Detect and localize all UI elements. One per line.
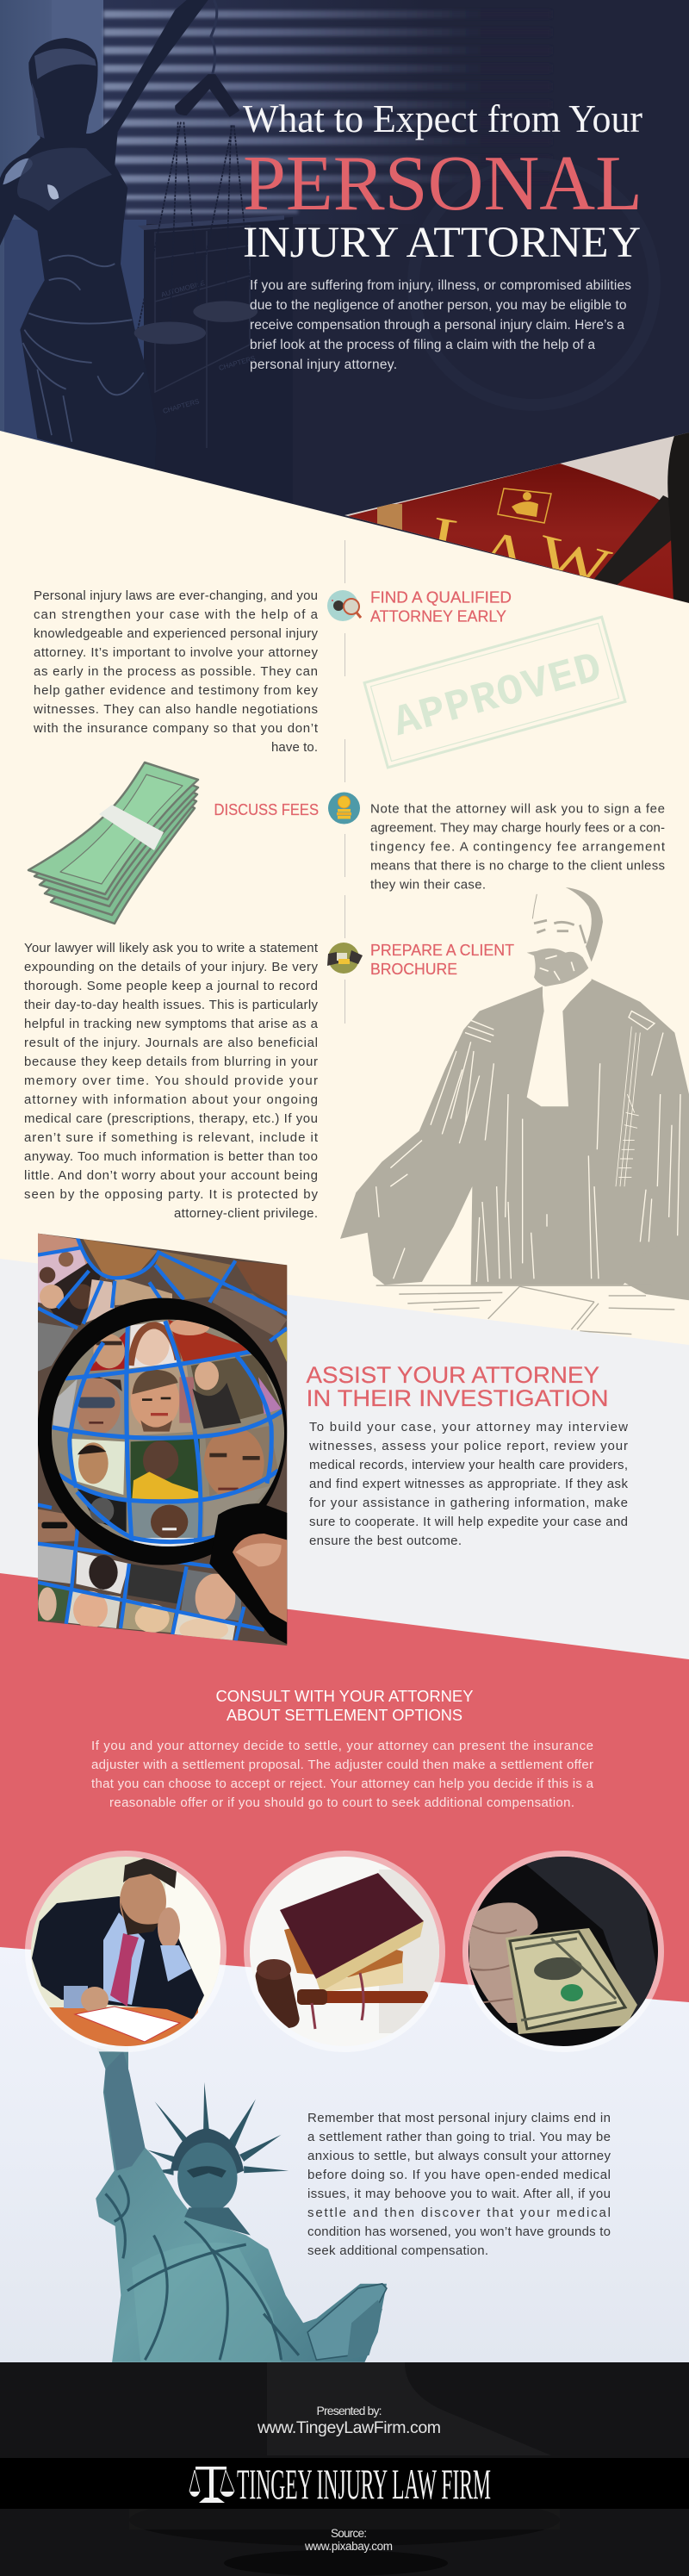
text: settlement options: If you and your attorney decide to settle, your attorney can present the insurance [91,1739,593,1753]
text: presented by: Presented by: [317,2404,382,2417]
intro text: personal injury attorney. [250,358,397,372]
text: find a qualified attorney early: witnesses. They can also handle negotiations [33,702,318,717]
heading: consult with your attorney: CONSULT WITH YOUR ATTORNEY [215,1688,474,1705]
text: discuss fees: means that there is no charge to the client unless [370,858,665,874]
heading: find a qualified attorney early: ATTORNEY EARLY [370,608,506,625]
text: settlement options: reasonable offer or if you should go to court to seek additional compensation. [109,1795,574,1810]
heading: assist your attorney: ASSIST YOUR ATTORNEY [307,1362,599,1388]
timeline line segments [344,540,346,1024]
icon: magnifier and key [327,590,361,621]
stamp: approved [364,617,625,768]
icon: coins [328,793,360,824]
intro text: If you are suffering from injury, illness, or compromised abilities [250,278,631,293]
text: prepare a client brochure: aren’t sure if something is relevant, include it [24,1130,319,1145]
text: closing advice: anxious to settle, but always consult your attorney [307,2149,611,2163]
panel: footer [0,2362,689,2576]
heading: assist your attorney: IN THEIR INVESTIGATION [307,1385,608,1411]
stamp: approved: APPROVED [388,644,607,749]
title [243,96,642,267]
text: source: Source: [331,2527,367,2540]
logo: scales icon [189,2467,234,2503]
text: source: www.pixabay.com [304,2540,393,2553]
text: find a qualified attorney early: Personal injury laws are ever-changing, and you [34,588,318,603]
text: settlement options: adjuster with a settlement proposal. The adjuster could then make a settlement offer [91,1758,593,1772]
text: assist your attorney [308,1420,629,1548]
text: closing advice: Remember that most personal injury claims end in [307,2111,611,2125]
text: settlement options: that you can choose to accept or reject. Your attorney can help you decide if this is a [91,1776,594,1791]
text: prepare a client brochure: Your lawyer will likely ask you to write a statement [24,941,319,955]
intro text: brief look at the process of filing a claim with the help of a [250,338,595,352]
text: closing advice: a settlement rather than going to trial. You may be [307,2130,611,2144]
intro text: due to the negligence of another person, you may be eligible to [250,298,627,313]
photo circle: attorney on the phone [25,1851,227,2052]
gold emblem [498,488,551,523]
text: assist your attorney: sure to cooperate. It will help expedite your case and [309,1515,628,1529]
text: closing advice: issues, it may behoove you to wait. After all, if you [307,2187,611,2201]
text: prepare a client brochure: result of the injury. Journals are also beneficial [24,1036,318,1050]
panel: cream steps background [0,431,689,1353]
panel: hero background: CHAPTERS [218,354,256,372]
image: statue of liberty [96,2046,387,2362]
text: prepare a client brochure: medical care (prescriptions, therapy, etc.) If you [24,1111,318,1126]
text: find a qualified attorney early: attorney. It’s important to involve your attorney [34,645,319,660]
heading: assist your attorney [307,1362,608,1411]
text: prepare a client brochure: memory over time. You should provide your [24,1073,318,1088]
heading: find a qualified attorney early: FIND A QUALIFIED [370,589,512,607]
panel: closing section background [0,1947,689,2365]
text: closing advice: seek additional compensation. [307,2243,488,2258]
title: What to Expect from Your [243,96,642,140]
text: find a qualified attorney early: have to. [271,740,318,755]
image: law book [344,431,689,603]
heading: consult with your attorney [215,1688,474,1724]
text: assist your attorney: medical records, interview your health care providers, [309,1458,628,1472]
text: discuss fees: agreement. They may charge hourly fees or a con- [370,820,665,836]
icon: handshake [327,943,363,974]
text: prepare a client brochure: attorney-client privilege. [174,1206,318,1221]
text: assist your attorney: for your assistance in gathering information, make [309,1496,628,1510]
heading: consult with your attorney: ABOUT SETTLEMENT OPTIONS [227,1707,462,1724]
text: find a qualified attorney early: can strengthen your case with the help of a [34,607,319,622]
panel: settlement section background [0,1573,689,2007]
title: INJURY ATTORNEY [243,219,641,267]
text: settlement options [91,1739,594,1810]
text: discuss fees: tingency fee. A contingency fee arrangement [370,839,666,855]
panel: assist section background [0,1259,689,1659]
gold LAW lettering: A [474,517,536,589]
panel: hero background [0,0,689,603]
heading: prepare a client brochure [370,942,514,978]
text: prepare a client brochure: attorney with information about your ongoing [24,1092,318,1107]
text: discuss fees: they win their case. [370,877,486,893]
text: presented by: www.TingeyLawFirm.com [257,2418,441,2437]
text: discuss fees: Note that the attorney will ask you to sign a fee [370,801,665,817]
text: prepare a client brochure: helpful in tracking new symptoms that arise as a [24,1017,319,1031]
text: prepare a client brochure: their day-to-day health issues. This is particularly [24,998,319,1012]
photo circle: law books and gavel [244,1851,448,2052]
text: assist your attorney: witnesses, assess your police report, review your [308,1439,628,1453]
intro text: receive compensation through a personal injury claim. Here’s a [250,318,624,333]
image: statue of justice with scales [0,0,258,468]
text: assist your attorney: To build your case, your attorney may interview [309,1420,628,1434]
gold LAW lettering [436,517,613,577]
text: presented by [257,2404,441,2437]
heading: prepare a client brochure: BROCHURE [370,961,457,978]
text: prepare a client brochure [24,941,319,1221]
text: closing advice [307,2111,611,2258]
photo circle: hand holding a dollar bill [462,1851,664,2052]
text: assist your attorney: ensure the best outcome. [309,1534,462,1548]
image: judge in robe engraving [340,887,689,1335]
heading: prepare a client brochure: PREPARE A CLIENT [370,942,514,959]
text: prepare a client brochure: seen by the opposing party. It is protected by [24,1187,319,1202]
text: assist your attorney: and find expert witnesses as appropriate. If they ask [309,1477,629,1491]
heading: discuss fees: DISCUSS FEES [214,801,319,818]
text: closing advice: condition has worsened, you won’t have grounds to [307,2224,611,2239]
text: prepare a client brochure: little. And don’t worry about your account being [24,1168,318,1183]
intro text [250,278,631,372]
text: find a qualified attorney early: with the insurance company so that you don’t [33,721,319,736]
text: find a qualified attorney early: as early in the process as possible. They can [34,664,318,679]
text: prepare a client brochure: thorough. Some people keep a journal to record [24,979,318,993]
text: source [304,2527,393,2553]
image: globe of faces under magnifying glass [34,1228,293,1658]
text: closing advice: before doing so. If you have open-ended medical [307,2168,611,2182]
text: find a qualified attorney early [33,588,319,755]
text: prepare a client brochure: anyway. Too much information is better than too [24,1149,318,1164]
title: PERSONAL [243,140,642,227]
panel: hero background: CHAPTERS [162,397,200,415]
text: find a qualified attorney early: knowledgeable and experienced personal injury [34,626,319,641]
text: prepare a client brochure: expounding on the details of your injury. Be very [24,960,319,974]
gold LAW lettering: W [531,522,617,600]
text: find a qualified attorney early: help gather evidence and testimony from key [34,683,319,698]
text: closing advice: settle and then discover that your medical [307,2206,611,2220]
text: prepare a client brochure: because they keep details from blurring in your [24,1055,318,1069]
gold LAW lettering: L [425,504,481,575]
heading: find a qualified attorney early [370,589,512,625]
panel: hero background: AUTOMOBILE [160,279,206,299]
image: stack of money [28,762,198,924]
text: discuss fees [370,801,666,893]
logo band: Tingey Injury Law Firm [0,2458,689,2509]
